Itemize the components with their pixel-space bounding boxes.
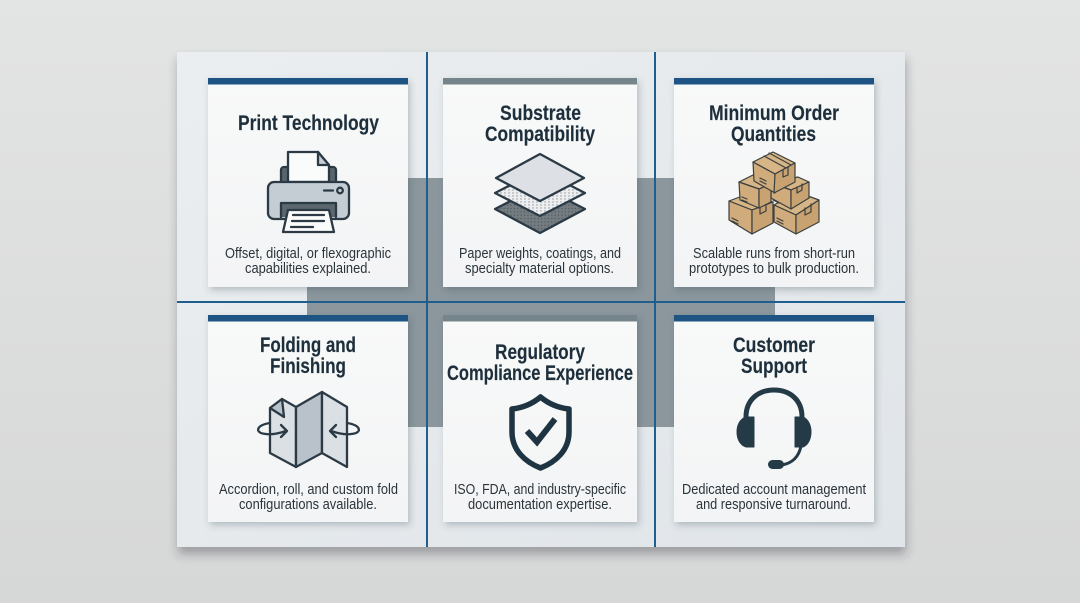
- panel: print technology: [208, 78, 408, 287]
- heading: folding and finishing: Finishing: [270, 355, 346, 378]
- panel: customer support: [674, 315, 874, 522]
- heading: customer support: Customer: [733, 334, 815, 357]
- description: customer support: and responsive turnaround.: [696, 497, 851, 513]
- heading: regulatory compliance experience: [447, 341, 633, 385]
- description: print technology: capabilities explained.: [245, 261, 371, 277]
- heading: substrate compatibility: [485, 102, 595, 146]
- icon: headset: [737, 390, 811, 469]
- icon: printer: [268, 152, 349, 232]
- icon: stacked boxes: [729, 152, 819, 234]
- panel: regulatory compliance experience: [443, 315, 637, 522]
- icon: folded sheet: [258, 392, 359, 467]
- description: minimum order quantities: Scalable runs from short-run: [693, 246, 855, 262]
- icon: shield with check: [512, 397, 569, 468]
- description: customer support: [682, 482, 866, 513]
- description: substrate compatibility: specialty material options.: [465, 261, 614, 277]
- panel: substrate compatibility: [443, 78, 637, 287]
- box tape and label marks: [732, 153, 811, 224]
- heading: substrate compatibility: Substrate: [500, 102, 581, 125]
- heading: minimum order quantities: [709, 102, 839, 146]
- heading: customer support: [733, 334, 815, 378]
- heading: print technology: Print Technology: [238, 112, 379, 135]
- description: substrate compatibility: Paper weights, coatings, and: [459, 246, 621, 262]
- heading: substrate compatibility: Compatibility: [485, 123, 595, 146]
- description: customer support: Dedicated account management: [682, 482, 866, 498]
- heading: minimum order quantities: Quantities: [731, 123, 816, 146]
- description: print technology: [225, 246, 391, 277]
- heading: folding and finishing: Folding and: [260, 334, 356, 357]
- sheet: [177, 52, 905, 547]
- description: substrate compatibility: [459, 246, 621, 277]
- heading: minimum order quantities: Minimum Order: [709, 102, 839, 125]
- heading: folding and finishing: [260, 334, 356, 378]
- heading: customer support: Support: [741, 355, 807, 378]
- description: print technology: Offset, digital, or flexographic: [225, 246, 391, 262]
- description: regulatory compliance experience: [454, 482, 626, 513]
- panel: folding and finishing: [208, 315, 408, 522]
- panel: minimum order quantities: [674, 78, 874, 287]
- description: folding and finishing: configurations available.: [239, 497, 377, 513]
- description: folding and finishing: [219, 482, 398, 513]
- description: regulatory compliance experience: ISO, FDA, and industry-specific: [454, 482, 626, 498]
- heading: regulatory compliance experience: Compliance Experience: [447, 362, 633, 385]
- description: regulatory compliance experience: documentation expertise.: [468, 497, 612, 513]
- icon: material layers: [495, 154, 585, 233]
- description: minimum order quantities: prototypes to bulk production.: [689, 261, 859, 277]
- heading: regulatory compliance experience: Regulatory: [495, 341, 585, 364]
- description: folding and finishing: Accordion, roll, and custom fold: [219, 482, 398, 498]
- description: minimum order quantities: [689, 246, 859, 277]
